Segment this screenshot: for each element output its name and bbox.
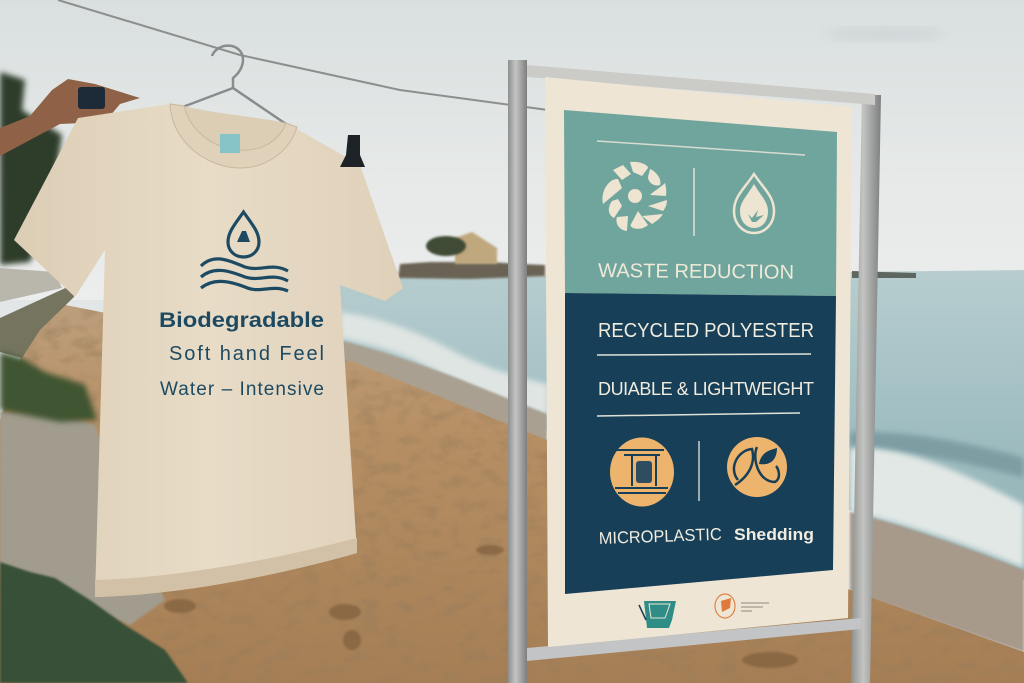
hem shadow xyxy=(95,538,357,597)
label: Shedding: Shedding xyxy=(734,525,814,544)
icon: water drop with leaf xyxy=(734,174,774,233)
collar xyxy=(170,104,297,168)
path and railing xyxy=(0,268,74,358)
icon: recycling wheel xyxy=(602,162,667,231)
heading: RECYCLED POLYESTER: RECYCLED POLYESTER xyxy=(598,320,814,342)
small print xyxy=(741,603,769,611)
divider top xyxy=(597,141,805,155)
sea xyxy=(300,270,1024,580)
sign banner xyxy=(545,77,852,647)
bottom bar xyxy=(527,618,861,661)
icon: water drop and waves xyxy=(201,212,288,291)
trees left xyxy=(0,72,62,265)
shirt text: Water - Intensive: Water – Intensive xyxy=(160,379,324,400)
divider xyxy=(597,354,811,355)
hand holding shirt xyxy=(0,79,140,156)
neck interior xyxy=(184,106,286,150)
neck label xyxy=(220,134,240,153)
headland with building xyxy=(398,232,916,279)
panel: material properties xyxy=(565,293,836,594)
top bar xyxy=(527,65,875,105)
surf foam right xyxy=(850,448,1024,568)
sign frame xyxy=(508,60,881,683)
left pole xyxy=(508,60,527,683)
concrete walkway xyxy=(0,412,165,625)
bush left xyxy=(0,352,97,422)
clothesline wire xyxy=(58,0,548,110)
surf foam left xyxy=(340,312,548,416)
sand xyxy=(0,300,1024,683)
icon: leaf crossed xyxy=(727,437,787,497)
shrub bottom left xyxy=(0,562,188,683)
divider vertical xyxy=(693,168,695,236)
label: MICROPLASTIC: MICROPLASTIC xyxy=(598,525,722,548)
logo: orange mark xyxy=(715,594,769,618)
divider vertical xyxy=(698,441,700,501)
sand texture xyxy=(0,300,1024,683)
sky xyxy=(0,0,1024,300)
right pole xyxy=(851,95,881,683)
icon: microfibre filter machine xyxy=(610,438,674,506)
wet sand left xyxy=(340,340,547,445)
divider xyxy=(597,413,800,416)
heading: DUIABLE & LIGHTWEIGHT: DUIABLE & LIGHTWEIGHT xyxy=(598,379,814,399)
hanger xyxy=(180,46,286,124)
logo: teal basket xyxy=(639,601,676,628)
sand footprints xyxy=(164,545,798,668)
shirt body xyxy=(14,104,403,597)
wet sand right xyxy=(850,512,1024,652)
shirt text: Biodegradable: Biodegradable xyxy=(159,309,324,332)
shirt text: Soft hand Feel: Soft hand Feel xyxy=(169,343,324,365)
cloud streak xyxy=(825,27,945,41)
panel: waste reduction xyxy=(564,110,837,296)
clip xyxy=(340,135,365,167)
t-shirt xyxy=(14,104,403,597)
heading: WASTE REDUCTION: WASTE REDUCTION xyxy=(598,260,794,284)
surf band right xyxy=(850,432,1024,478)
